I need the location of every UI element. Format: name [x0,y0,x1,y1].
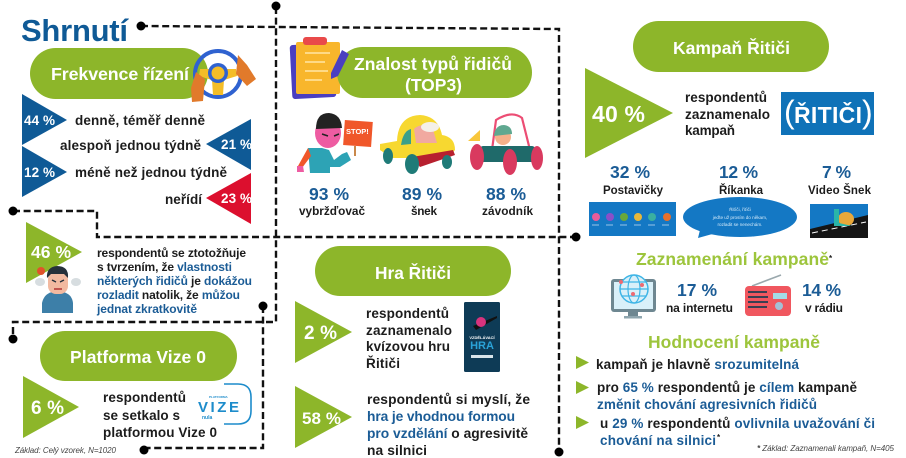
heading pill: frekvence: Frekvence řízení [51,64,190,84]
text: hra statement: zaznamenalo [366,323,452,338]
footnote: base: Základ: Celý vzorek, N=1020 [14,446,117,455]
stat triangle: 6 % [23,376,79,438]
stat: 89 % šnek: 89 % [402,184,442,204]
text: 46 % statement: některých řidičů je dokážou [97,274,252,288]
stat: 32 % postavičky: 32 % [610,162,650,182]
image: phone with game [464,302,500,372]
speech bubble: říkanka: jeďte už prosím do někam, [712,215,767,220]
stat: 12 % [22,146,227,197]
panel: znalost typů řidičů [290,37,543,218]
stat triangle: 40 %: 40 % [592,101,645,127]
text: 58 % statement [367,392,530,458]
text: hra statement: Řitiči [366,356,400,371]
stat: 12 % říkanka: 12 % [719,162,758,182]
text: 46 % statement: respondentů se ztotožňuje [97,246,246,260]
bullet: ovlivnila: u 29 % respondentů ovlivnila uvažování či [600,416,875,431]
logo: vize nula: PLATFORMA [209,395,228,399]
speech bubble: říkanka: rozladit se nenechám. [718,222,762,227]
heading pill: hra: Hra Řitiči [375,263,451,283]
stat: 12 % říkanka [719,162,764,197]
stat triangle: 46 % [26,222,82,283]
text: 46 % statement: s tvrzením, že vlastnosti [97,260,232,274]
stat: 7 % video šnek: Video Šnek [808,184,872,197]
stat: 89 % šnek [402,184,442,218]
text: vize statement [103,390,217,440]
text: vize statement: platformou Vize 0 [103,425,217,440]
text: 58 % statement: na silnici [367,443,427,458]
image: video šnek [810,204,868,238]
section: zaznamenání kampaně [611,249,843,318]
footnote: campaign base: * Základ: Zaznamenali kampaň, N=405 [757,444,895,453]
panel: platforma vize 0 [23,331,251,440]
heading: zaznamenání: Zaznamenání kampaně [636,249,829,269]
text: kampaň statement: respondentů [685,90,767,105]
stat: 23 %: neřídí [165,192,203,207]
text: vize statement: se setkalo s [103,408,180,423]
heading pill: znalost: Znalost typů řidičů [354,54,512,74]
text: 58 % statement: hra je vhodnou formou [367,409,515,424]
stat: 23 %: 23 % [221,191,252,206]
logo: vize nula [198,384,251,424]
text: hra statement: respondentů [366,306,449,321]
stat triangle: 2 %: 2 % [304,323,337,344]
logo: vize nula: nula [202,415,212,421]
stat: 12 % říkanka: Říkanka [719,184,764,197]
stat triangle: 6 %: 6 % [31,398,64,419]
icon: pencil [331,50,349,79]
stat: 44 %: denně, téměř denně [75,113,205,128]
stat: 88 % závodník: 88 % [486,184,526,204]
heading pill: hra [315,246,511,296]
heading pill: platforma: Platforma Vize 0 [70,347,206,367]
bullet: srozumitelná: kampaň je hlavně srozumitelná [596,357,799,372]
panel: kampaň řitiči [585,21,874,238]
stat: 12 %: 12 % [24,165,55,180]
speech bubble: říkanka: Řiťiči, řiťiči [729,205,751,212]
driver: vybržďovač: STOP! [346,127,369,136]
bullet: ovlivnila [576,416,875,448]
text: hra statement: kvízovou hru [366,339,450,354]
icon: radio [745,275,791,316]
stat: 21 %: alespoň jednou týdně [60,138,201,153]
stat: 32 % postavičky [603,162,664,197]
stat: 44 %: 44 % [24,113,55,128]
icon: steering wheel [191,51,256,102]
stat triangle: 40 % [585,68,673,158]
dashed connector lines [8,2,580,456]
stat: 14 % v rádiu [802,280,843,315]
speech bubble: říkanka [683,197,797,238]
stat: 93 % vybržďovač: 93 % [309,184,349,204]
text: hra statement [366,306,452,371]
title: Shrnutí [21,13,129,48]
stat: 88 % závodník [482,184,533,218]
logo: řitiči: ) [862,94,873,130]
stat: 7 % video šnek [808,162,872,197]
stat triangle: 2 % [295,301,352,363]
section: hodnocení kampaně [576,332,875,448]
stat: 17 % na internetu: na internetu [666,301,733,315]
text: kampaň statement: kampaň [685,123,735,138]
stat: 23 % [165,173,252,224]
text: kampaň statement: zaznamenalo [685,107,770,122]
stat: 88 % závodník: závodník [482,204,533,218]
heading pill: platforma [40,331,237,381]
text: vize statement: respondentů [103,390,186,405]
footnote star: * [829,254,833,263]
stat: 93 % vybržďovač: vybržďovač [299,204,365,218]
stat triangle: 58 % [295,386,352,448]
text: 58 % statement: pro vzdělání o agresivitě [367,426,528,441]
driver: závodník [468,114,543,175]
stat: 17 % na internetu: 17 % [677,280,717,300]
image: postavičky [589,202,676,236]
panel: frekvence řízení [22,48,256,224]
text: 46 % statement: rozladit natolik, že můžou [97,288,240,302]
image: phone with game: VZDĚLÁVACÍ [469,335,496,340]
stat: 12 %: méně než jednou týdně [75,165,227,180]
bullet: ovlivnila: * [717,433,721,442]
heading pill: znalost: (TOP3) [405,75,462,95]
stat: 44 % [22,94,205,145]
bullet: cílem kampaně [576,380,857,412]
text: 58 % statement: respondentů si myslí, že [367,392,530,407]
bullet: ovlivnila: chování na silnici [600,433,716,448]
stat: 32 % postavičky: Postavičky [603,185,664,197]
heading pill: kampaň [633,21,829,72]
heading pill: kampaň: Kampaň Řitiči [673,37,790,58]
logo: řitiči: ŘITIČI [794,101,862,128]
stat: 7 % video šnek: 7 % [822,162,851,182]
stat: 21 % [60,119,252,170]
text: kampaň statement [685,90,770,138]
panel: 46 % agreement [26,222,252,316]
text: 46 % statement [96,246,252,316]
text: 46 % statement: jednat zkratkovitě [96,302,197,316]
driver: vybržďovač [297,113,373,173]
bullet: cílem kampaně: pro 65 % respondentů je cílem kampaně [597,380,857,395]
driver: šnek [380,115,455,174]
icon: angry man [35,266,81,313]
stat: 89 % šnek: šnek [411,204,437,218]
stat triangle: 58 %: 58 % [302,409,341,428]
logo: vize nula: VIZE [198,399,239,416]
stat triangle: 46 %: 46 % [31,242,71,262]
heading: hodnocení: Hodnocení kampaně [648,332,820,352]
stat: 17 % na internetu [666,280,733,315]
panel: hra řitiči [295,246,530,458]
stat: 93 % vybržďovač [299,184,365,218]
heading pill: znalost [337,47,532,98]
heading pill: frekvence [30,48,208,99]
icon: clipboard [290,37,340,99]
bullet: cílem kampaně: změnit chování agresivních řidičů [597,397,817,412]
stat: 21 %: 21 % [221,137,252,152]
logo: řitiči: ( [784,94,795,130]
image: phone with game: HRA [470,340,494,352]
stat: 14 % v rádiu: 14 % [802,280,841,300]
stat: 14 % v rádiu: v rádiu [805,301,843,315]
icon: monitor with globe [611,275,656,318]
logo: řitiči [781,92,874,135]
